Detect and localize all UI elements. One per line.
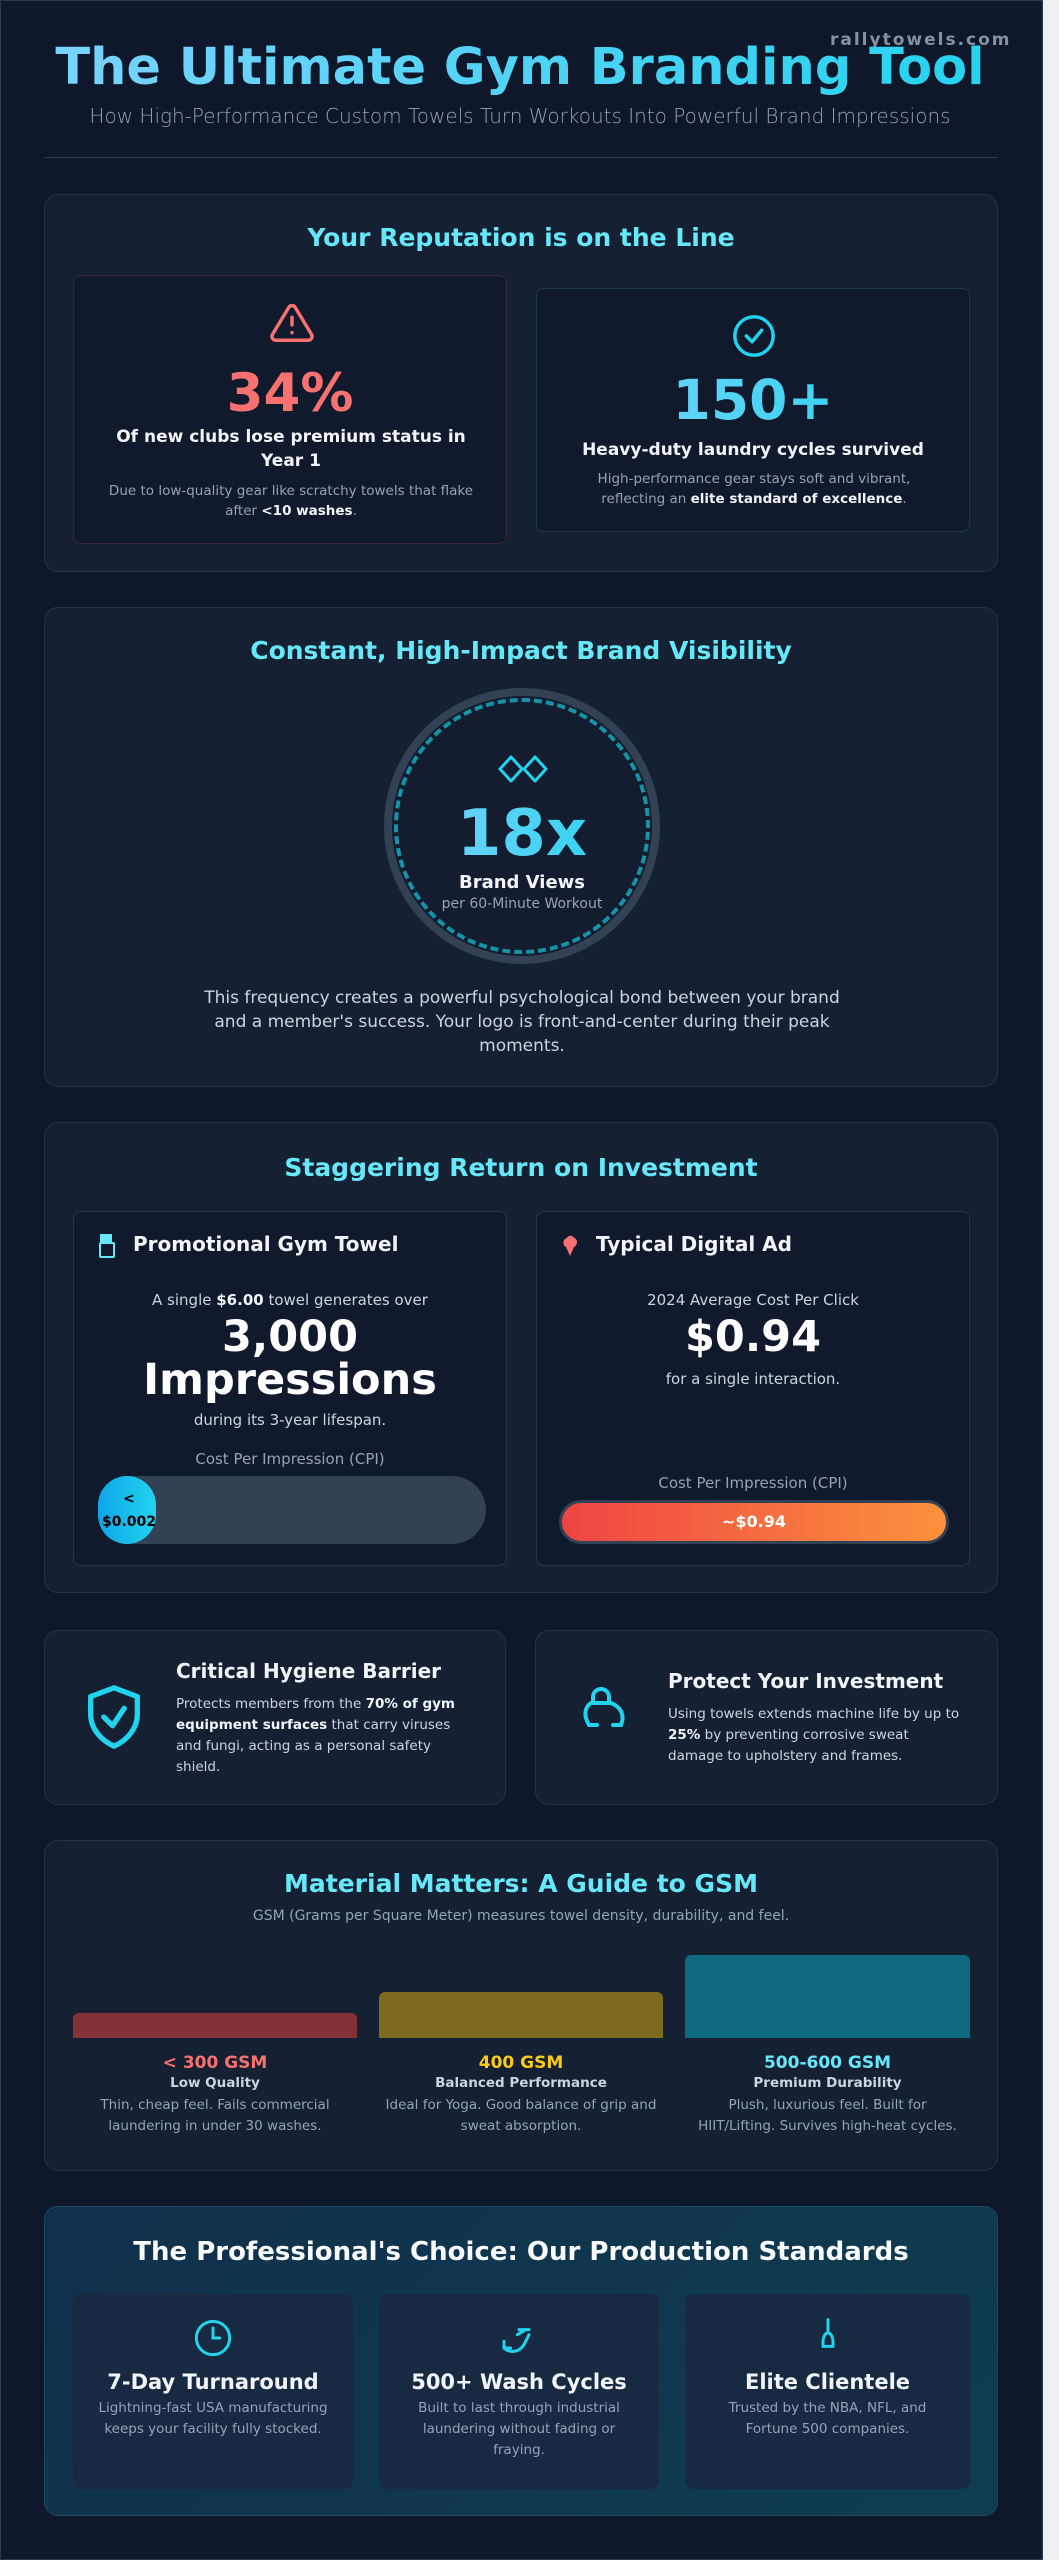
card: digital ad: 2024 Average Cost Per Click (647, 1291, 859, 1309)
label: low: < 300 GSM (163, 2053, 267, 2073)
card: wash cycles: Built to last through industrial laundering without fading or fraying. (418, 2400, 620, 2458)
desc: High-performance gear stays soft and vibrant, reflecting an elite standard of excellence. (598, 471, 910, 507)
panel: GSM (44, 1840, 998, 2171)
label: high (698, 2053, 957, 2134)
card: investment (535, 1630, 998, 1805)
label: Heavy-duty laundry cycles survived (582, 440, 924, 460)
label: high: 500-600 GSM (764, 2053, 891, 2073)
bar: low (73, 2013, 357, 2038)
bar: high (685, 1955, 970, 2038)
stat: 34% (227, 363, 353, 424)
heading: The Professional's Choice: Our Production Standards (133, 2237, 909, 2267)
panel: reputation (44, 194, 998, 572)
text: A single $6.00 towel generates over (152, 1291, 428, 1309)
card: 34% (73, 275, 507, 544)
icon: bell (822, 2318, 834, 2348)
number (392, 796, 652, 872)
bar chart (73, 1955, 970, 2134)
watermark: rallytowels.com (830, 30, 1012, 50)
big number: $0.94 (685, 1312, 821, 1362)
label: mid: Ideal for Yoga. Good balance of grip and sweat absorption. (386, 2097, 656, 2134)
label: mid: 400 GSM (479, 2053, 563, 2073)
card: clientele: Trusted by the NBA, NFL, and Fortune 500 companies. (729, 2400, 926, 2437)
label: low: Thin, cheap feel. Fails commercial laundering in under 30 washes. (100, 2097, 330, 2134)
panel: visibility (44, 607, 998, 1087)
stat: 150+ (673, 368, 833, 432)
label: high: Premium Durability (753, 2075, 902, 2091)
icon: warning (270, 304, 314, 342)
bar: mid (379, 1992, 663, 2038)
desc: Using towels extends machine life by up to 25% by preventing corrosive sweat damage to upholstery and frames. (668, 1706, 959, 1764)
heading: Protect Your Investment (668, 1669, 943, 1693)
icon: flame (563, 1236, 577, 1256)
card: turnaround: 7-Day Turnaround (107, 2370, 319, 2394)
header: Typical Digital Ad (596, 1232, 792, 1256)
icon: bottle (99, 1234, 115, 1258)
label: mid (386, 2053, 656, 2134)
bar: CPI ad: ~$0.94 (722, 1512, 786, 1531)
icon: infinity (498, 755, 548, 783)
heading: Material Matters: A Guide to GSM (284, 1869, 758, 1898)
label: Brand Views (459, 872, 585, 893)
number: 18x (457, 797, 587, 871)
heading: Critical Hygiene Barrier (176, 1659, 441, 1683)
heading: Your Reputation is on the Line (307, 223, 735, 252)
card: hygiene (44, 1630, 506, 1805)
icon: check circle (733, 315, 775, 357)
card: clientele (685, 2294, 970, 2489)
panel: production standards (44, 2206, 998, 2516)
icon: lock (583, 1687, 625, 1728)
subheading: GSM (Grams per Square Meter) measures towel density, durability, and feel. (253, 1908, 789, 1924)
card: clientele: Elite Clientele (745, 2370, 910, 2394)
card: 150+ (536, 288, 970, 532)
heading: Staggering Return on Investment (284, 1153, 758, 1182)
card: digital ad: for a single interaction. (666, 1370, 840, 1388)
desc: Protects members from the 70% of gym equipment surfaces that carry viruses and fungi, acting as a personal safety shield. (176, 1696, 455, 1775)
icon: hand (502, 2328, 530, 2353)
icon: clock (194, 2320, 232, 2356)
title: The Ultimate Gym Branding Tool (55, 38, 985, 97)
card: wash cycles: 500+ Wash Cycles (411, 2370, 627, 2394)
card: towel: Cost Per Impression (CPI) (195, 1450, 385, 1468)
icon: shield (88, 1685, 140, 1749)
bar: CPI ad (559, 1500, 949, 1544)
panel: ROI (44, 1122, 998, 1593)
big number: 3,000 (222, 1312, 358, 1362)
card: digital ad: Cost Per Impression (CPI) (658, 1474, 848, 1492)
card: towel (73, 1211, 507, 1566)
paragraph: This frequency creates a powerful psychological bond between your brand and a member's success. Your logo is front-and-center during their peak moments. (204, 988, 840, 1056)
card: turnaround (73, 2294, 353, 2489)
subtitle: How High-Performance Custom Towels Turn Workouts Into Powerful Brand Impressions (89, 104, 951, 128)
card: towel: during its 3-year lifespan. (194, 1411, 386, 1429)
label: high: Plush, luxurious feel. Built for HIIT/Lifting. Survives high-heat cycles. (698, 2097, 957, 2134)
circle stat (384, 688, 660, 964)
label: low (100, 2053, 330, 2134)
label: mid: Balanced Performance (435, 2075, 607, 2091)
header: Promotional Gym Towel (133, 1232, 398, 1256)
label: low: Low Quality (170, 2075, 260, 2091)
bar: CPI towel: < (123, 1491, 135, 1507)
card: turnaround: Lightning-fast USA manufacturing keeps your facility fully stocked. (98, 2400, 328, 2437)
sublabel: per 60-Minute Workout (442, 896, 602, 912)
desc: Due to low-quality gear like scratchy towels that flake after <10 washes. (109, 483, 473, 519)
stat (537, 367, 969, 433)
bar: CPI towel: $0.002 (102, 1514, 156, 1530)
bar: CPI towel (98, 1476, 486, 1544)
label: Of new clubs lose premium status in Year 1 (116, 427, 466, 471)
big number (143, 1312, 437, 1405)
card: wash cycles (379, 2294, 659, 2489)
card: digital ad (536, 1211, 970, 1566)
heading: Constant, High-Impact Brand Visibility (250, 636, 792, 665)
big number: Impressions (143, 1355, 437, 1405)
